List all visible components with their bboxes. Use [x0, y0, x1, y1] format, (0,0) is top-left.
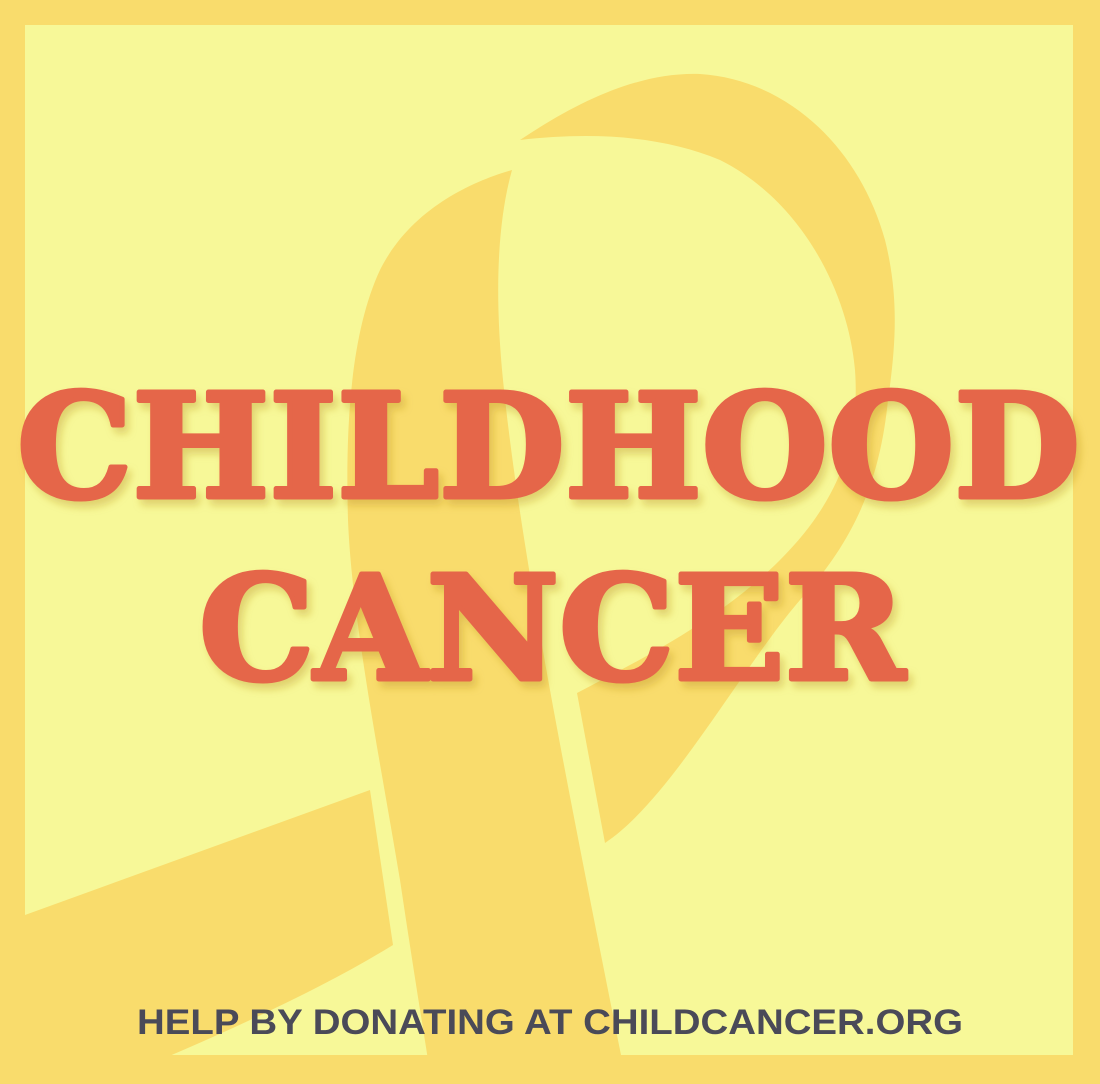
title line 1: CHILDHOOD: [17, 362, 1080, 531]
icon: awareness ribbon: [20, 74, 895, 1060]
footer call to action: HELP BY DONATING AT CHILDCANCER.ORG: [137, 1003, 963, 1042]
title line 2: CANCER: [199, 544, 906, 713]
title: [17, 362, 1080, 713]
